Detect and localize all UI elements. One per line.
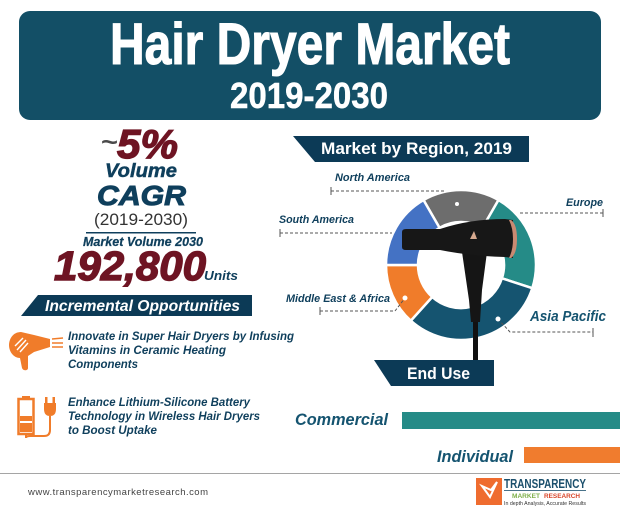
heading: incremental opportunities [21, 295, 252, 316]
region label: north america: North America [335, 172, 410, 184]
CAGR label: CAGR [97, 180, 187, 211]
volume label: Volume [105, 161, 177, 182]
heading: market by region: Market by Region, 2019 [321, 139, 512, 158]
logo name: TRANSPARENCY [504, 476, 586, 491]
title years: 2019-2030 [230, 75, 388, 116]
icon: battery and plug [18, 396, 56, 438]
bar chart: end use [295, 410, 620, 466]
text: opportunity one: Vitamins in Ceramic Heating [68, 343, 227, 357]
region marker dots [402, 202, 500, 322]
text: opportunity two [68, 395, 260, 437]
hair dryer image [402, 219, 517, 360]
heading: end use [374, 360, 494, 386]
region label: middle east and africa: Middle East & Africa [286, 293, 390, 305]
market volume label: Market Volume 2030 [83, 235, 203, 249]
region label: asia pacific: Asia Pacific [529, 308, 607, 325]
label: individual: Individual [437, 447, 514, 466]
segment: europe [482, 200, 536, 288]
segment: south america [386, 200, 440, 265]
text: opportunity one: Innovate in Super Hair Dryers by Infusing [68, 329, 295, 343]
tilde: ~ [101, 129, 118, 156]
title text: Hair Dryer Market [110, 12, 510, 77]
heading: end use: End Use [407, 364, 470, 383]
segment: north america [424, 190, 498, 228]
icon: hair dryer [9, 332, 63, 370]
region label: south america: South America [279, 214, 354, 226]
bar: commercial [402, 412, 620, 429]
logo mark [476, 478, 502, 505]
CAGR stat block [54, 121, 238, 289]
units label: Units [204, 268, 238, 283]
title banner [19, 11, 601, 120]
text: opportunity one: Components [68, 357, 138, 371]
text: opportunity two: to Boost Uptake [68, 423, 157, 437]
website url: www.transparencymarketresearch.com [27, 487, 208, 498]
segment: middle east and africa [386, 265, 432, 321]
market volume value: 192,800 [54, 243, 206, 289]
5 percent value: 5% [117, 121, 178, 167]
segment: asia pacific [411, 278, 532, 340]
donut chart: market by region [386, 190, 536, 340]
logo research: RESEARCH [544, 493, 580, 500]
logo market: MARKET [512, 493, 540, 500]
logo: transparency market research [476, 476, 586, 507]
logo tagline: In depth Analysis, Accurate Results [504, 501, 586, 507]
text: opportunity one [68, 329, 295, 371]
bar: individual [524, 447, 620, 463]
CAGR period: (2019-2030) [94, 210, 188, 229]
region label: europe: Europe [566, 197, 603, 209]
text: opportunity two: Technology in Wireless Hair Dryers [68, 409, 260, 423]
heading: market by region [293, 136, 529, 162]
text: opportunity two: Enhance Lithium-Silicone Battery [68, 395, 251, 409]
region leader lines [280, 187, 603, 337]
heading: incremental opportunities: Incremental Opportunities [45, 298, 240, 315]
label: commercial: Commercial [295, 410, 389, 429]
